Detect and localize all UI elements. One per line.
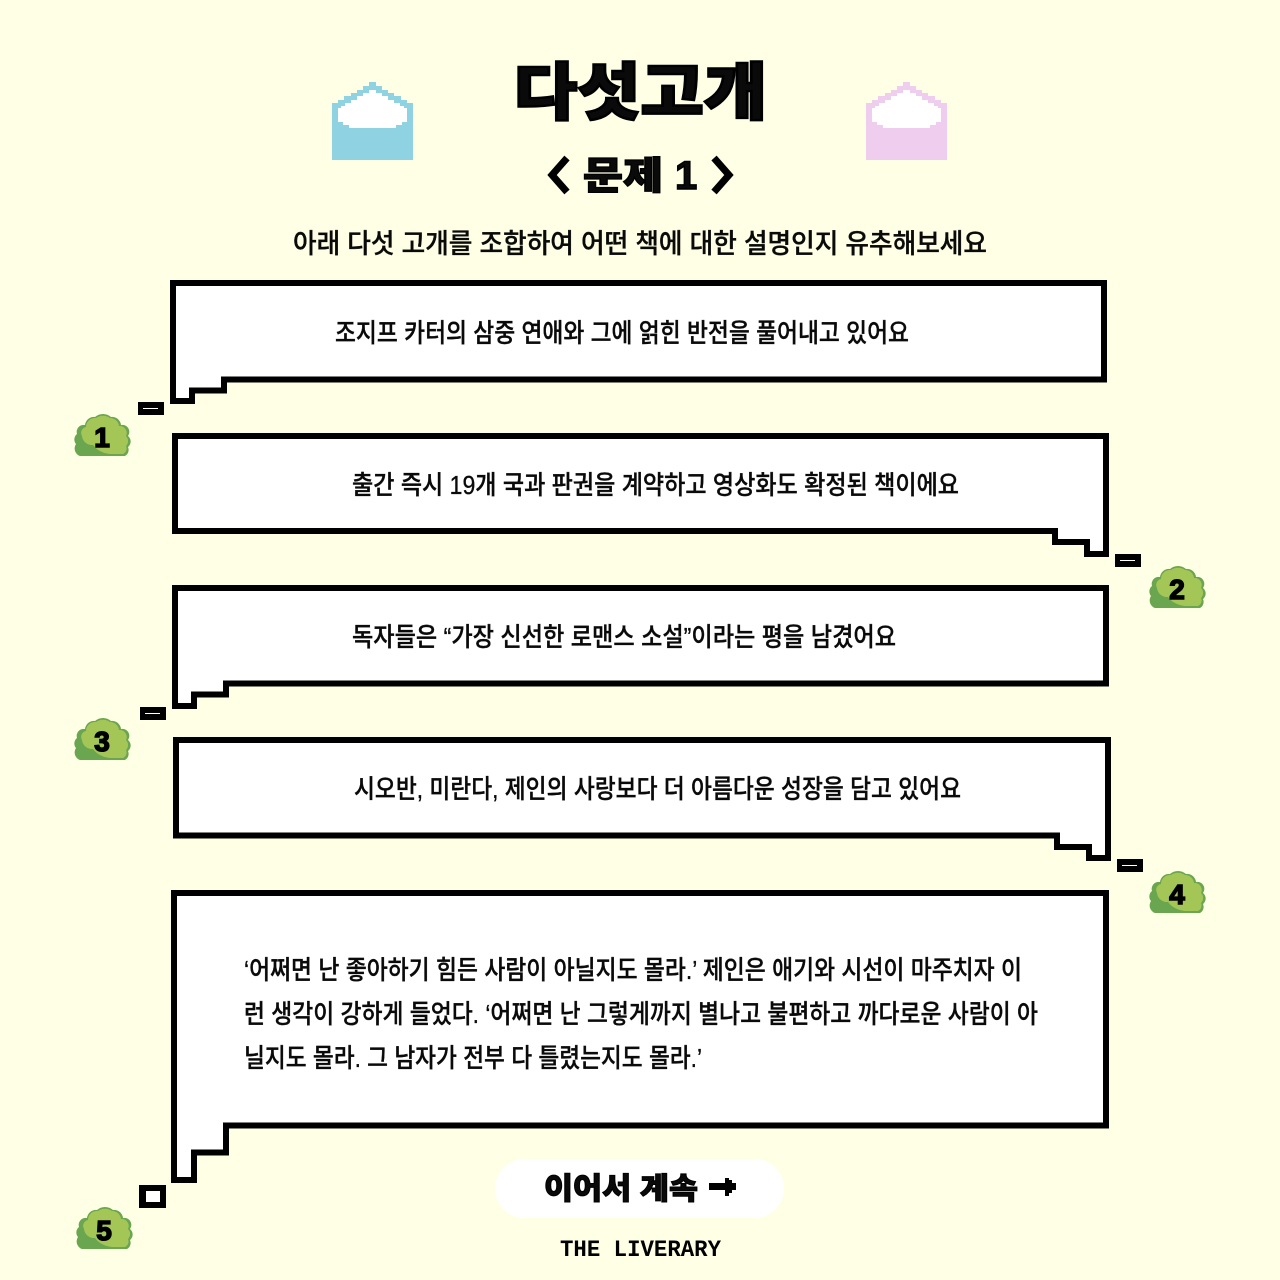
tag: clue 2 xyxy=(1115,554,1141,567)
clue 5 text: 닐지도 몰라. 그 남자가 전부 다 틀렸는지도 몰라.’ xyxy=(244,1043,702,1073)
icon: bush number 2 xyxy=(1149,566,1206,608)
panel: clue 3 xyxy=(175,588,1106,706)
icon: pink envelope xyxy=(866,82,947,160)
icon: right chevron xyxy=(714,158,729,192)
clue 5 text: 런 생각이 강하게 들었다. ‘어쩌면 난 그렇게까지 별나고 불편하고 까다로운 사람이 아 xyxy=(244,999,1038,1029)
button text: 이어서 계속 xyxy=(544,1173,698,1206)
icon: bush number 5: 5 xyxy=(96,1215,112,1246)
clue 5 text xyxy=(244,955,1038,1073)
tag: clue 3 xyxy=(140,707,166,720)
brand name: THE LIVERARY xyxy=(560,1237,721,1263)
icon: left chevron xyxy=(552,158,567,192)
icon: bush number 4 xyxy=(1149,871,1206,913)
clue 1 text: 조지프 카터의 삼중 연애와 그에 얽힌 반전을 풀어내고 있어요 xyxy=(335,318,909,348)
panel: clue 2 xyxy=(175,436,1106,554)
clue 4 text: 시오반, 미란다, 제인의 사랑보다 더 아름다운 성장을 담고 있어요 xyxy=(354,774,961,804)
subtitle xyxy=(552,154,729,198)
panel: clue 1 xyxy=(173,283,1104,401)
instruction text: 아래 다섯 고개를 조합하여 어떤 책에 대한 설명인지 유추해보세요 xyxy=(293,229,987,259)
clue 2 text: 출간 즉시 19개 국과 판권을 계약하고 영상화도 확정된 책이에요 xyxy=(352,470,959,500)
panel: clue 4 xyxy=(176,740,1108,858)
subtitle number: 1 xyxy=(675,154,697,198)
icon: blue envelope xyxy=(332,82,413,160)
panel: clue 5 xyxy=(174,893,1106,1180)
icon: bush number 1: 1 xyxy=(94,422,110,453)
tag: clue 5 xyxy=(139,1185,166,1208)
tag: clue 4 xyxy=(1117,859,1143,872)
clue 5 text: ‘어쩌면 난 좋아하기 힘든 사람이 아닐지도 몰라.’ 제인은 애기와 시선이 마주치자 이 xyxy=(244,955,1022,985)
icon: bush number 3 xyxy=(74,718,131,760)
icon: bush number 5 xyxy=(76,1207,133,1249)
tag: clue 1 xyxy=(138,402,164,415)
subtitle text: 문제 xyxy=(583,156,663,198)
icon: arrow xyxy=(709,1178,736,1196)
clue 3 text: 독자들은 “가장 신선한 로맨스 소설”이라는 평을 남겼어요 xyxy=(352,622,896,652)
button: continue xyxy=(495,1159,784,1218)
icon: bush number 1 xyxy=(74,414,131,456)
icon: bush number 3: 3 xyxy=(94,726,110,757)
title: 다섯고개 xyxy=(514,59,767,128)
icon: bush number 4: 4 xyxy=(1169,879,1185,910)
icon: bush number 2: 2 xyxy=(1169,574,1185,605)
